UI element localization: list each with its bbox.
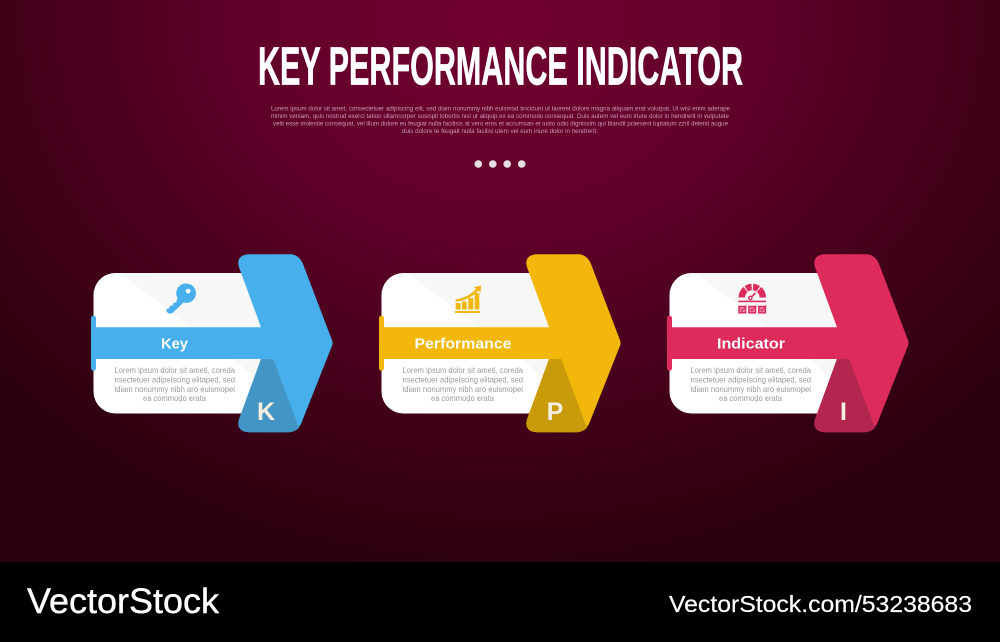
description: Lorem ipsum dolor sit ameti, coreda (690, 366, 812, 375)
footer logo: VectorStock (27, 582, 220, 621)
panel: Key (91, 254, 333, 432)
description: ea commodo erata (719, 394, 783, 403)
letter fold (526, 359, 587, 432)
card shade (120, 273, 270, 388)
description (402, 366, 524, 403)
description: Lorem ipsum dolor sit ameti, coreda (402, 366, 524, 375)
pagination dots (474, 160, 526, 168)
icon: gauge (738, 287, 766, 313)
description: nsectetuer adipelscing elitaped, sed (402, 376, 523, 384)
description: Lorem ipsum dolor sit ameti, coreda (114, 366, 236, 375)
letter K: K (257, 398, 275, 426)
card shade (696, 273, 846, 388)
description: ea commodo erata (143, 394, 207, 403)
white card (382, 273, 556, 414)
intro paragraph (271, 106, 731, 135)
white card (94, 273, 268, 414)
side tab (667, 316, 672, 371)
label: Performance (414, 336, 512, 352)
description: ea commodo erata (431, 394, 495, 403)
description: idiam nonummy nibh aro euismopei (690, 385, 811, 394)
description: idiam nonummy nibh aro euismopei (402, 385, 523, 394)
side tab (379, 316, 384, 371)
arrow (672, 254, 909, 432)
letter fold (814, 359, 875, 432)
description: nsectetuer adipelscing elitaped, sed (690, 376, 811, 384)
footer bar (0, 562, 1000, 642)
label: Key (161, 336, 188, 352)
description: idiam nonummy nibh aro euismopei (114, 385, 235, 394)
footer url: VectorStock.com/53238683 (669, 591, 972, 617)
icon: key (166, 283, 196, 314)
intro paragraph: velit esse molestie consequat, vel illum dolore eu feugiat nulla facilisis at vero eros et accumsan et iusto odio dignissim qui blandit praesent luptatum zzril delenit augue (273, 120, 729, 128)
panel: Performance (379, 254, 621, 432)
label: Indicator (717, 336, 785, 352)
icon: growth chart (455, 286, 481, 313)
panel: Indicator (667, 254, 909, 432)
intro paragraph: Lorem ipsum dolor sit amet, consectetuer adipiscing elit, sed diam nonummy nibh euismod tincidunt ut laoreet dolore magna aliquam erat volutpat. Ut wisi enim aderape (271, 106, 731, 112)
card shade (408, 273, 558, 388)
description (114, 366, 236, 403)
letter I: I (840, 398, 847, 426)
arrow (96, 254, 333, 432)
letter fold (238, 359, 299, 432)
white card (670, 273, 844, 414)
intro paragraph: minim veniam, quis nostrud exerci tation ullamcorper suscipit lobortis nisl ut aliquip ex ea commodo consequat. Duis autem vel eum iriure dolor in hendrerit in vulputate (271, 113, 730, 120)
description (690, 366, 812, 403)
description: nsectetuer adipelscing elitaped, sed (114, 376, 235, 384)
side tab (91, 316, 96, 371)
arrow (384, 254, 621, 432)
letter P: P (547, 398, 563, 426)
intro paragraph: duis dolore te feugait nulla facilisi utem vel eum iriure dolor in hendrerit. (402, 128, 598, 135)
